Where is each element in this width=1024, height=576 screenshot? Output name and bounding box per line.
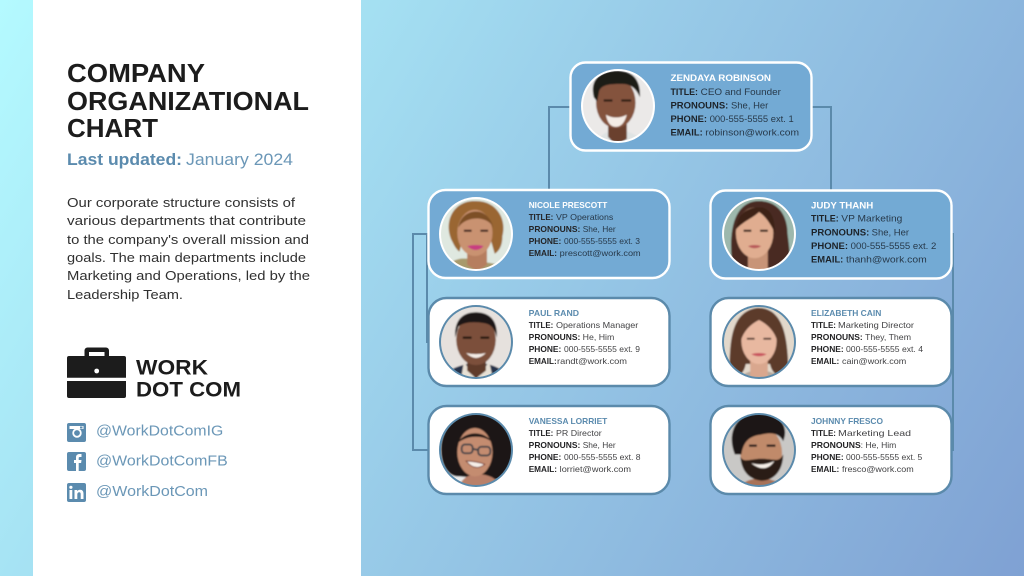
details: PHONE: (811, 344, 844, 354)
details: 000-555-5555 ext. 8 (564, 452, 641, 462)
name: PAUL RAND (529, 308, 579, 318)
last updated line: January 2024 (186, 151, 293, 169)
details: PRONOUNS: (529, 440, 580, 450)
social: instagram: @WorkDotComIG (96, 424, 223, 440)
details: PRONOUNS: (670, 99, 728, 110)
details: VP Operations (556, 212, 613, 222)
details: PRONOUNS: (811, 332, 863, 342)
details: EMAIL: (811, 254, 843, 265)
details: PRONOUNS (811, 440, 861, 450)
description paragraph: Marketing and Operations, led by the (67, 268, 310, 283)
icon: briefcase logo (67, 348, 126, 398)
details: She, Her (583, 440, 616, 450)
details: They, Them (865, 332, 911, 342)
details: Marketing Lead (838, 428, 911, 438)
details: TITLE: (529, 212, 553, 222)
details: TITLE: (811, 428, 836, 438)
details: prescott@work.com (560, 248, 641, 258)
details: 000-555-5555 ext. 2 (851, 240, 936, 251)
details (811, 428, 923, 474)
description paragraph: Leadership Team. (67, 287, 183, 302)
details: cain@work.com (842, 356, 906, 366)
details: 000-555-5555 ext. 4 (846, 344, 923, 354)
details (670, 86, 799, 137)
company name: WORK (136, 356, 208, 379)
title (67, 60, 309, 143)
details: Marketing Director (838, 320, 914, 330)
details: PR Director (556, 428, 602, 438)
details: PHONE: (670, 113, 707, 124)
name: ELIZABETH CAIN (811, 308, 881, 318)
social: instagram (67, 423, 223, 442)
last updated line (67, 151, 293, 169)
details: PHONE: (811, 452, 844, 462)
details: : He, Him (861, 440, 896, 450)
description paragraph: goals. The main departments include (67, 250, 306, 265)
name: ZENDAYA ROBINSON (670, 72, 771, 83)
photo: Zendaya Robinson (581, 69, 655, 143)
title: COMPANY (67, 60, 205, 88)
details: EMAIL: (811, 356, 839, 366)
details: Operations Manager (556, 320, 639, 330)
photo: Paul Rand (439, 305, 513, 379)
details: CEO and Founder (701, 86, 781, 97)
photo: Johnny Fresco (722, 413, 796, 487)
details: PRONOUNS: (529, 332, 580, 342)
details: robinson@work.com (705, 126, 799, 137)
connector: CEO to VP Operations (549, 107, 571, 191)
card: Nicole Prescott (428, 190, 670, 278)
title: CHART (67, 115, 158, 143)
connector: operations bracket (413, 234, 429, 450)
name: JUDY THANH (811, 200, 874, 211)
details: EMAIL: (811, 464, 839, 474)
details: TITLE: (811, 213, 839, 224)
card: Johnny Fresco (710, 406, 952, 494)
panel: left sidebar (33, 0, 361, 576)
description paragraph: various departments that contribute (67, 213, 306, 228)
name: VANESSA LORRIET (529, 416, 608, 426)
details (811, 320, 923, 366)
description paragraph: Our corporate structure consists of (67, 195, 295, 210)
last updated line: Last updated: (67, 151, 182, 169)
details: 000-555-5555 ext. 9 (564, 344, 640, 354)
social: linkedin: @WorkDotCom (96, 484, 208, 500)
details (529, 320, 640, 366)
details: 000-555-5555 ext. 3 (564, 236, 640, 246)
details: EMAIL: (529, 248, 557, 258)
photo: Judy Thanh (722, 197, 796, 271)
details (811, 213, 936, 265)
card: Elizabeth Cain (710, 298, 952, 386)
description paragraph: to the company's overall mission and (67, 232, 309, 247)
details: fresco@work.com (842, 464, 914, 474)
details: TITLE: (811, 320, 836, 330)
details: PHONE: (529, 452, 561, 462)
card: Zendaya Robinson (570, 62, 812, 150)
details: PRONOUNS: (811, 227, 869, 238)
connector: marketing bracket (952, 234, 953, 450)
name: JOHNNY FRESCO (811, 416, 883, 426)
social: facebook: @WorkDotComFB (96, 453, 228, 469)
details: She, Her (872, 227, 909, 238)
details (529, 428, 641, 474)
details: EMAIL: (670, 126, 703, 137)
details: He, Him (583, 332, 614, 342)
company name (136, 356, 241, 402)
details: TITLE: (529, 320, 553, 330)
details: EMAIL: (529, 464, 557, 474)
details: TITLE: (529, 428, 553, 438)
description paragraph (67, 195, 310, 302)
details: PRONOUNS: (529, 224, 580, 234)
card: Paul Rand (428, 298, 670, 386)
name: NICOLE PRESCOTT (529, 200, 608, 210)
details: TITLE: (670, 86, 698, 97)
details: VP Marketing (841, 213, 902, 224)
details: 000-555-5555 ext. 1 (710, 113, 794, 124)
details: lorriet@work.com (560, 464, 631, 474)
details: PHONE: (811, 240, 848, 251)
details (529, 212, 641, 258)
details: 000-555-5555 ext. 5 (846, 452, 923, 462)
details: She, Her (583, 224, 616, 234)
social: linkedin (67, 483, 208, 502)
details: thanh@work.com (846, 254, 927, 265)
photo: Elizabeth Cain (722, 305, 796, 379)
details: EMAIL: (529, 356, 557, 366)
details: PHONE: (529, 236, 561, 246)
connector: CEO to VP Marketing (811, 107, 831, 191)
photo: Vanessa Lorriet (439, 413, 513, 487)
card: Judy Thanh (710, 190, 952, 278)
details: randt@work.com (557, 356, 627, 366)
details: PHONE: (529, 344, 561, 354)
card: Vanessa Lorriet (428, 406, 670, 494)
company name: DOT COM (136, 379, 241, 402)
details: She, Her (731, 99, 768, 110)
photo: Nicole Prescott (439, 197, 513, 271)
social: facebook (67, 452, 228, 471)
title: ORGANIZATIONAL (67, 88, 309, 116)
